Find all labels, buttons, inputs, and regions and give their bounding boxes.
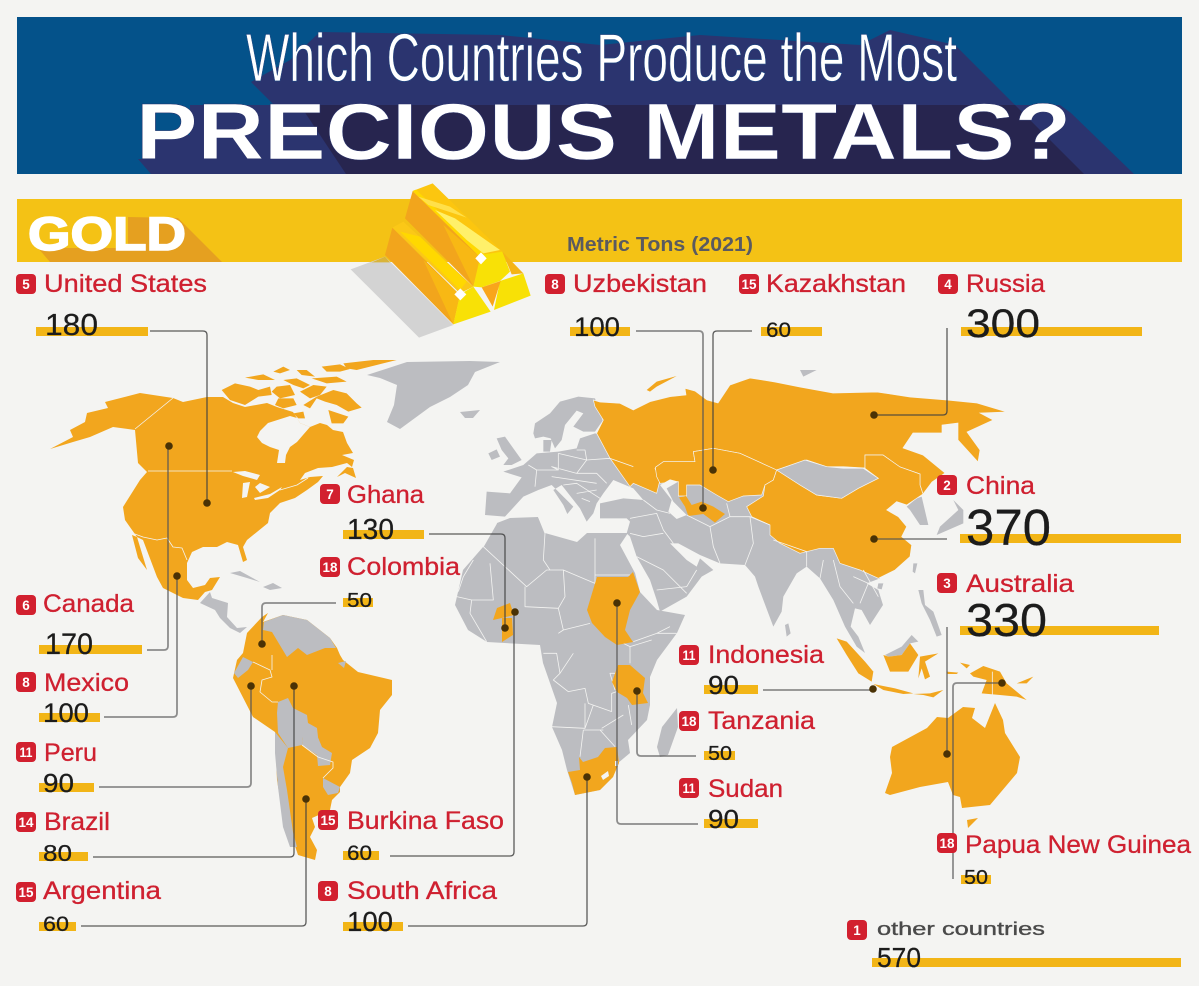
leader lines	[81, 328, 1002, 926]
map: South America	[233, 613, 392, 860]
map: Papua New Guinea	[970, 666, 1027, 700]
label: Uzbekistan	[545, 270, 707, 342]
label: Ghana: Ghana	[347, 481, 424, 509]
label: China	[937, 472, 1181, 556]
map: Africa	[455, 517, 685, 795]
label: United States	[16, 270, 207, 342]
map: North America	[50, 360, 397, 600]
label: Argentina	[16, 877, 161, 936]
label: Burkina Faso: 60	[347, 842, 372, 865]
label: South Africa	[318, 877, 497, 937]
map: Australia	[885, 703, 1020, 808]
label: United States: 5	[22, 277, 30, 292]
label: Tanzania: Tanzania	[708, 707, 815, 735]
label: Burkina Faso: Burkina Faso	[347, 807, 504, 835]
label: Sudan: 11	[682, 781, 696, 796]
map: Tanzania	[612, 665, 648, 705]
label: Burkina Faso	[318, 807, 504, 865]
label: Russia: 4	[944, 277, 952, 292]
label: China: 2	[943, 478, 951, 493]
label: Ghana: 7	[326, 487, 334, 502]
label: Brazil	[16, 808, 110, 866]
label: South Africa: 8	[324, 884, 332, 899]
label: Ghana	[320, 481, 424, 546]
map: Central America and Caribbean	[200, 571, 282, 633]
label: other countries	[847, 919, 1181, 973]
label: Tanzania: 18	[682, 714, 697, 729]
label: Russia: 300	[966, 302, 1040, 346]
label: Kazakhstan: Kazakhstan	[766, 270, 906, 298]
label: Canada: 6	[22, 598, 30, 613]
label: Uzbekistan: 100	[574, 312, 620, 342]
label: Brazil: 14	[18, 815, 34, 830]
label: Argentina: 60	[43, 913, 69, 936]
label: Canada: 170	[45, 628, 93, 661]
location dots	[165, 411, 1006, 803]
label: Papua New Guinea: 50	[964, 867, 988, 889]
label: Colombia: Colombia	[347, 553, 460, 581]
label: Colombia: 50	[347, 590, 372, 612]
header banner	[17, 17, 1182, 176]
label: Uzbekistan: Uzbekistan	[573, 270, 707, 298]
label: Papua New Guinea	[937, 831, 1191, 889]
label: Australia: 330	[966, 594, 1047, 646]
label: Tanzania: 50	[708, 743, 732, 765]
label: Russia: Russia	[966, 270, 1045, 298]
label: Indonesia: 90	[708, 670, 739, 700]
label: Indonesia	[679, 641, 824, 700]
map: Burkina Faso	[493, 603, 514, 620]
label: Sudan	[679, 775, 783, 834]
label: Papua New Guinea: Papua New Guinea	[965, 831, 1191, 859]
map: Caspian Sea	[660, 479, 687, 519]
label: Australia	[937, 570, 1159, 646]
label: China: 370	[966, 499, 1051, 556]
label: Australia: 3	[943, 576, 951, 591]
label: Colombia: 18	[322, 560, 338, 575]
label: Peru: 11	[20, 745, 33, 760]
label: Kazakhstan: 60	[766, 319, 791, 342]
label: Burkina Faso: 15	[320, 813, 336, 828]
label: Kazakhstan: 15	[742, 277, 757, 292]
world map	[50, 360, 1033, 860]
label: Mexico: 8	[22, 675, 30, 690]
label: Brazil: Brazil	[44, 808, 110, 836]
label: Peru: Peru	[44, 739, 97, 767]
map: Eurasia borders	[528, 450, 878, 603]
map: Kazakhstan	[655, 448, 777, 502]
label: Peru	[16, 739, 97, 798]
unit caption: Metric Tons (2021)	[567, 234, 753, 256]
label: Papua New Guinea: 18	[940, 836, 955, 851]
label: other countries: other countries	[877, 919, 1045, 939]
label: Uzbekistan: 8	[551, 277, 559, 292]
title line two: PRECIOUS METALS?	[136, 87, 1071, 176]
label: Mexico: Mexico	[44, 669, 129, 697]
label: Mexico: 100	[43, 698, 89, 728]
gold section band	[17, 199, 1182, 262]
label: Russia	[938, 270, 1142, 346]
map: Uzbekistan region	[679, 496, 725, 523]
heading: gold: GOLD	[28, 207, 186, 260]
map: Greenland and Iceland	[367, 361, 500, 429]
label: Kazakhstan	[739, 270, 906, 342]
label: Ghana: 130	[347, 514, 394, 546]
label: Australia: Australia	[966, 570, 1074, 598]
label: Indonesia: Indonesia	[708, 641, 824, 669]
label: Canada	[16, 590, 142, 661]
label: United States: 180	[45, 307, 98, 342]
label: Brazil: 80	[43, 840, 72, 866]
map: Europe, Middle East and Asia	[485, 370, 1007, 653]
label: Tanzania	[679, 707, 815, 765]
map: Ghana	[502, 618, 513, 642]
label: Argentina: 15	[18, 885, 34, 900]
label: Argentina: Argentina	[43, 877, 161, 905]
label: Peru: 90	[43, 768, 74, 798]
label: China: China	[966, 472, 1035, 500]
label: South Africa: South Africa	[347, 877, 497, 905]
icon: gold bars	[351, 183, 531, 338]
map: Russia	[593, 378, 1007, 494]
label: United States: United States	[44, 270, 207, 298]
label: Mexico	[16, 669, 129, 728]
label: Sudan: 90	[708, 804, 739, 834]
map: South Africa	[568, 747, 619, 795]
label: South Africa: 100	[347, 906, 393, 937]
label: Sudan: Sudan	[708, 775, 783, 803]
label: other countries: 1	[853, 923, 861, 938]
map: China	[747, 455, 923, 578]
map: Southeast Asia and Oceania	[837, 563, 1033, 828]
label: Colombia	[320, 553, 460, 612]
label: other countries: 570	[877, 942, 921, 973]
label: Canada: Canada	[43, 590, 134, 618]
map: Mongolia	[777, 460, 878, 498]
map: Sudan	[587, 572, 640, 645]
label: Indonesia: 11	[682, 648, 696, 663]
